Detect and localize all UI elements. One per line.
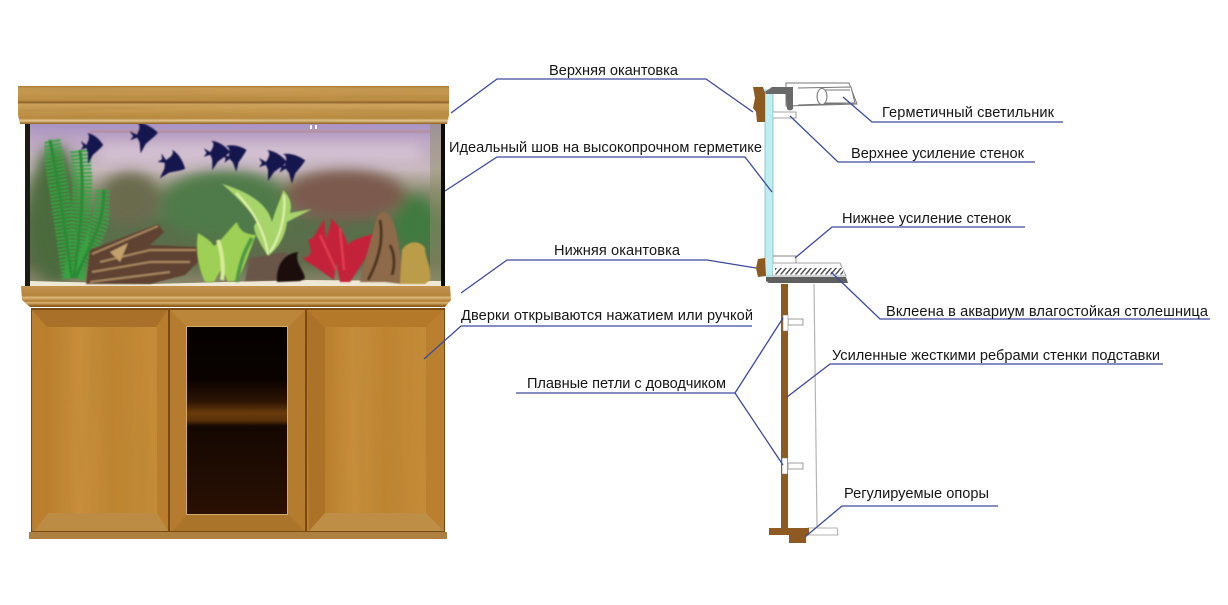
callout: upper reinforcement: [790, 116, 1035, 162]
callout: adjustable feet: Регулируемые опоры: [844, 486, 989, 502]
upper hinge: [783, 315, 803, 331]
lower box and hatched tabletop: [773, 263, 846, 276]
callout: bottom trim: Нижняя окантовка: [554, 243, 681, 259]
callout: top trim: [451, 63, 753, 113]
lower wall reinforcement: [773, 256, 796, 263]
rib line: [814, 284, 817, 526]
cabinet base: [29, 532, 447, 539]
lower hinge: [782, 458, 803, 474]
cabinet: [31, 308, 445, 532]
callout: hinges: [516, 318, 783, 465]
callout: lamp: Герметичный светильник: [882, 105, 1055, 121]
driftwood: [86, 224, 305, 284]
top cornice: [18, 86, 449, 124]
base and adjustable foot: [769, 528, 838, 543]
rocks: [360, 212, 430, 284]
callout: stand walls: [787, 348, 1163, 397]
callout: upper reinforcement: Верхнее усиление стенок: [851, 146, 1025, 162]
callout: tabletop: Вклеена в аквариум влагостойкая столешница: [886, 304, 1209, 320]
aquarium with cabinet photo: [18, 86, 451, 539]
cross-section diagram: [753, 83, 857, 543]
bottom trim: [21, 286, 451, 307]
callout: tabletop: [831, 272, 1210, 320]
glass wall: [765, 90, 773, 276]
upper wall reinforcement: [773, 112, 796, 118]
callout: bottom trim: [461, 243, 756, 293]
gray slab: [766, 277, 848, 283]
upper trim: [753, 87, 765, 122]
gravel: [30, 280, 441, 286]
gray lamp bracket: [765, 87, 793, 110]
plant: tall green: [50, 140, 104, 278]
callout: lower reinforcement: [795, 211, 1025, 258]
callout: seam: [445, 140, 772, 192]
callout: doors: Дверки открываются нажатием или ручкой: [461, 308, 753, 324]
fish school: [81, 121, 310, 186]
callout: lower reinforcement: Нижнее усиление стенок: [842, 211, 1012, 227]
right door: [307, 310, 444, 531]
callout: lamp: [843, 97, 1063, 122]
callout: hinges: Плавные петли с доводчиком: [527, 376, 726, 392]
dark decoration: [277, 252, 305, 282]
plant: light green broad leaves: [197, 184, 312, 282]
callout: doors: [424, 308, 753, 359]
plant: red: [302, 218, 380, 282]
stand wall: [781, 284, 788, 529]
callout: seam: Идеальный шов на высокопрочном герметике: [449, 140, 762, 156]
lower trim: [756, 258, 766, 277]
callout: top trim: Верхняя окантовка: [549, 63, 679, 79]
callout: adjustable feet: [805, 486, 998, 537]
sealed lamp: [786, 83, 857, 106]
centre glass door: [170, 310, 305, 531]
left door: [32, 310, 168, 531]
aquarium tank interior: [25, 121, 445, 286]
callout: stand walls: Усиленные жесткими ребрами стенки подставки: [832, 348, 1160, 364]
